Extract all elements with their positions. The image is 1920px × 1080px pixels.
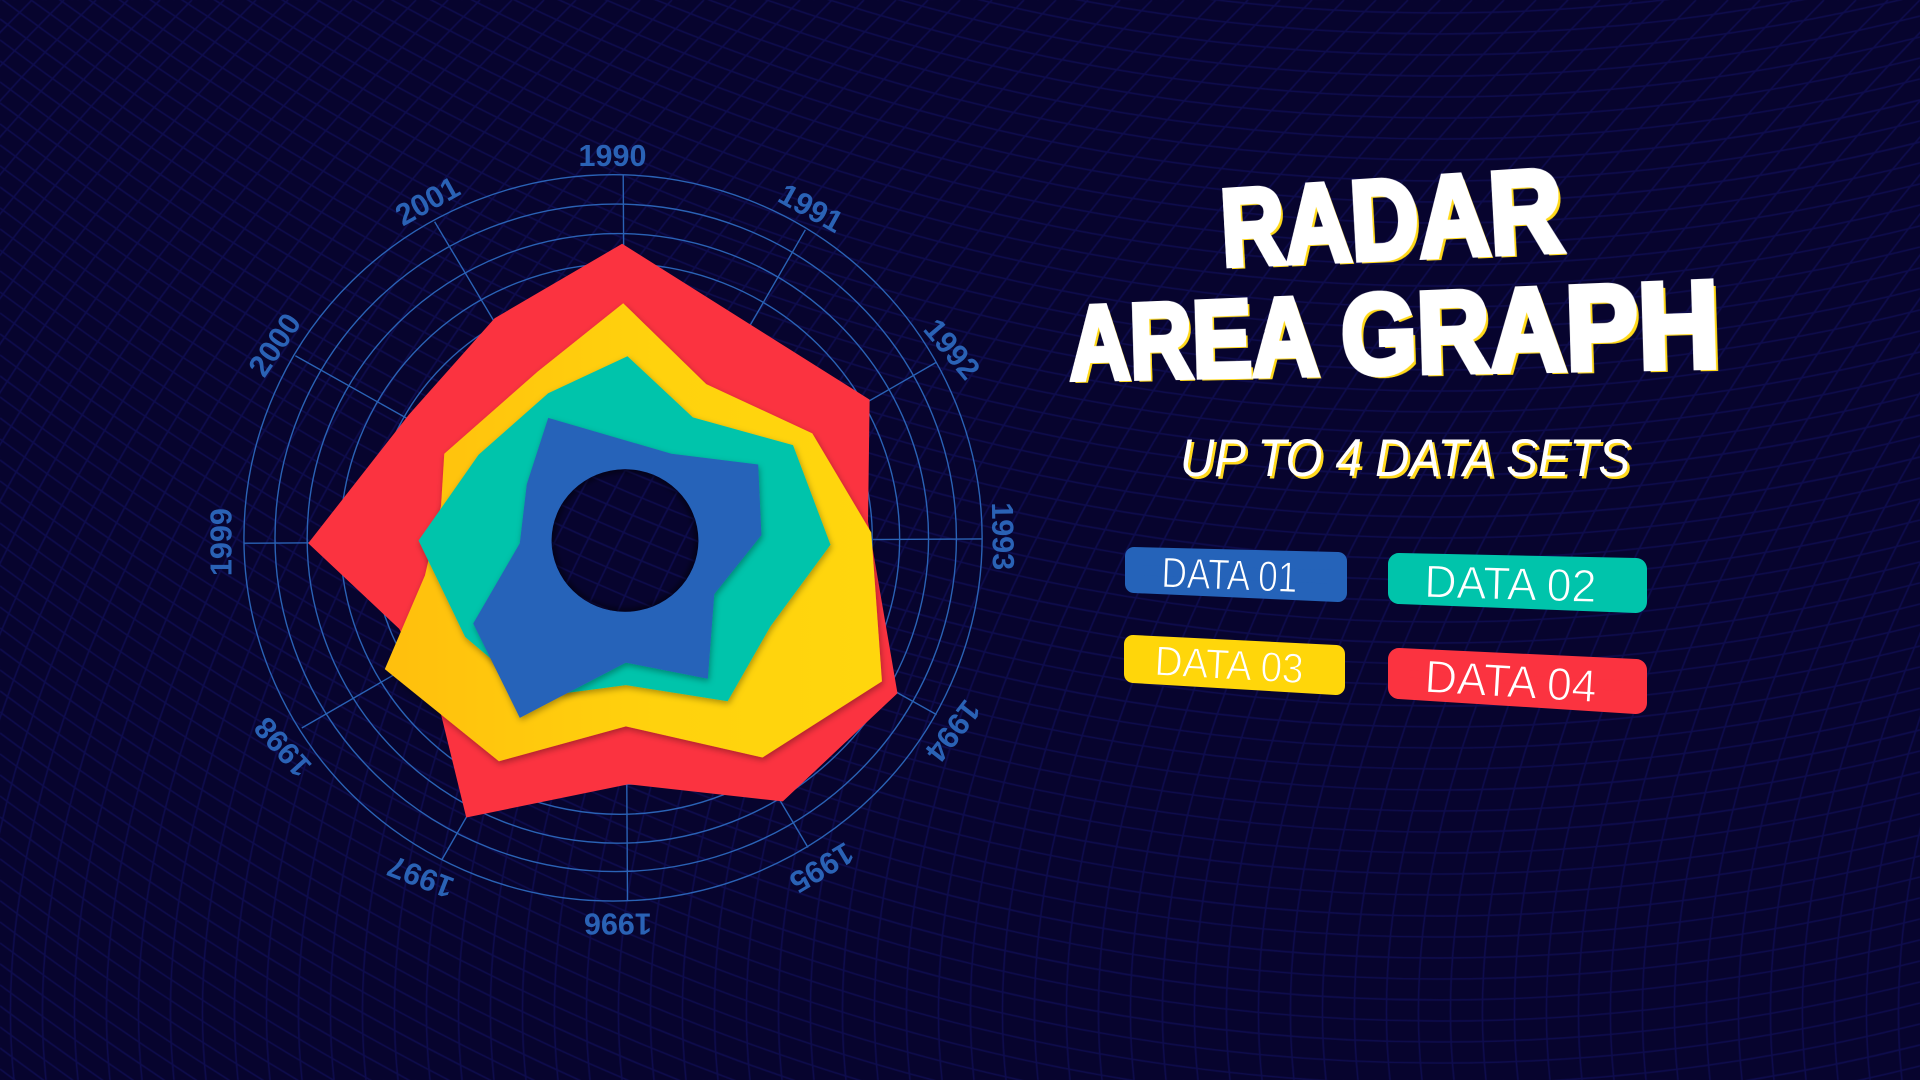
year labels: 1996 xyxy=(584,907,652,941)
legend item: data 03: DATA 03 xyxy=(1153,637,1305,692)
year labels: 1993 xyxy=(985,502,1020,570)
year labels: 1990 xyxy=(579,139,646,173)
year labels: 2001 xyxy=(390,170,466,233)
year labels: 1998 xyxy=(248,710,318,783)
year labels: 1991 xyxy=(773,177,849,240)
year labels: 1992 xyxy=(917,312,986,386)
subtitle: UP TO 4 DATA SETS xyxy=(1180,429,1630,488)
center hole xyxy=(552,469,698,612)
year labels: 1997 xyxy=(383,848,458,904)
area: data 02 teal xyxy=(419,356,831,701)
title xyxy=(1067,144,1721,401)
year labels xyxy=(204,139,1020,941)
year labels: 1994 xyxy=(918,693,987,768)
year labels: 1995 xyxy=(784,835,859,899)
area: data 03 yellow xyxy=(385,303,882,761)
title: RADAR xyxy=(1218,144,1566,289)
area: data 01 blue xyxy=(473,418,761,718)
radar chart xyxy=(204,139,1020,941)
year labels: 1999 xyxy=(204,508,238,576)
legend item: data 02: DATA 02 xyxy=(1424,555,1597,612)
legend item: data 01: DATA 01 xyxy=(1161,549,1298,602)
title: AREA GRAPH xyxy=(1067,255,1721,401)
legend item: data 04: DATA 04 xyxy=(1423,650,1598,712)
chart rings and spokes xyxy=(244,175,982,901)
area: data 04 red xyxy=(308,244,897,817)
year labels: 2000 xyxy=(242,307,308,383)
legend xyxy=(1133,549,1636,712)
